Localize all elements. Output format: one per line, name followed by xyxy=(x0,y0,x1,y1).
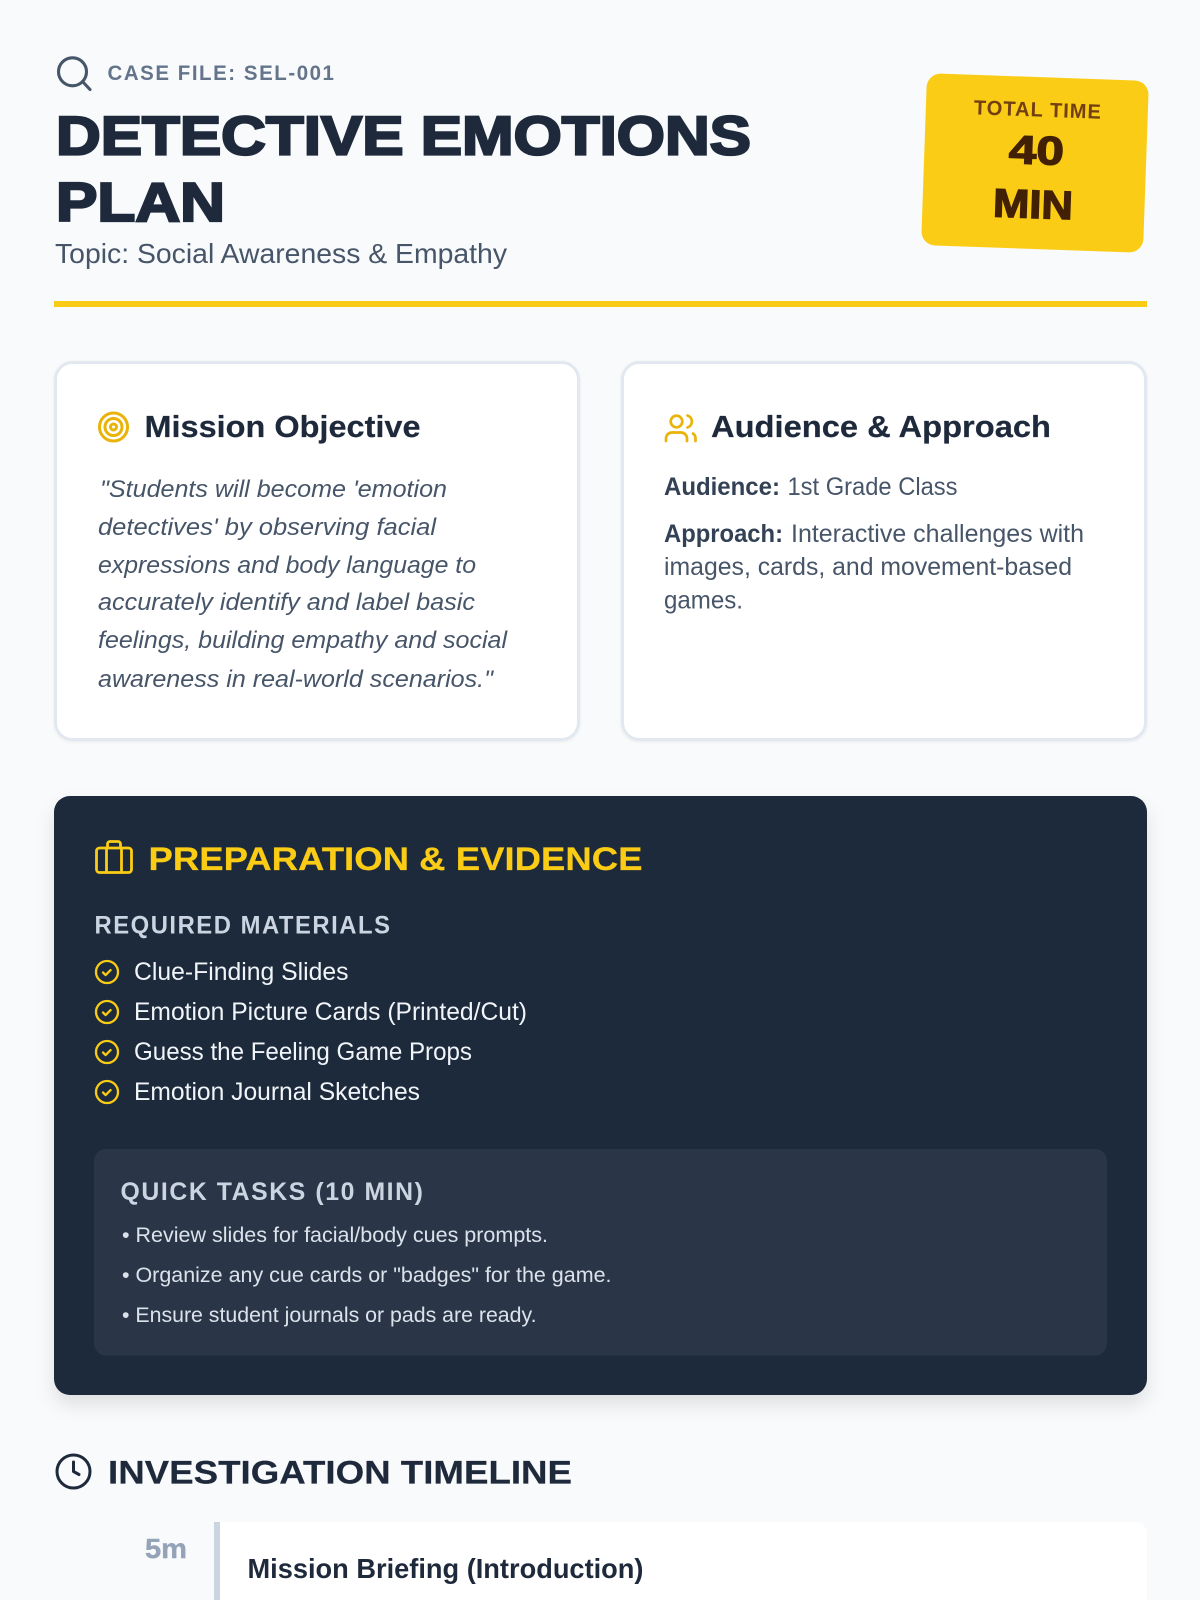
objective quote: detectives' by observing facial xyxy=(98,514,437,541)
icon: users xyxy=(666,416,696,441)
materials list xyxy=(96,958,527,1106)
quick tasks list: • Ensure student journals or pads are ready. xyxy=(122,1303,536,1327)
title: DETECTIVE EMOTIONS xyxy=(56,104,751,166)
approach text: Interactive challenges with xyxy=(791,520,1084,548)
header xyxy=(55,58,751,269)
timeline step: mission briefing xyxy=(145,1522,1147,1600)
approach text: Approach: xyxy=(664,520,783,548)
approach text: games. xyxy=(664,586,743,614)
heading: PREPARATION & EVIDENCE xyxy=(148,841,642,877)
heading: Mission Objective xyxy=(144,409,420,444)
item: cards: Emotion Picture Cards (Printed/Cut) xyxy=(134,998,527,1026)
icon: target xyxy=(100,413,128,441)
audience text: Audience: xyxy=(664,473,780,501)
item: slides: Clue-Finding Slides xyxy=(134,958,348,986)
total time badge xyxy=(921,73,1149,253)
total time badge: MIN xyxy=(992,182,1074,228)
objective quote xyxy=(98,476,508,693)
timeline heading: INVESTIGATION TIMELINE xyxy=(108,1454,572,1490)
step title: Mission Briefing (Introduction) xyxy=(248,1553,644,1584)
quick tasks box xyxy=(94,1149,1107,1356)
objective quote: expressions and body language to xyxy=(98,552,476,579)
panel: preparation and evidence xyxy=(54,796,1147,1395)
objective quote: awareness in real-world scenarios." xyxy=(98,666,494,693)
topic subtitle: Topic: Social Awareness & Empathy xyxy=(55,238,507,269)
approach text: images, cards, and movement-based xyxy=(664,553,1072,581)
panel: audience and approach xyxy=(622,362,1146,740)
heading: Audience & Approach xyxy=(711,409,1051,444)
timeline section xyxy=(57,1454,1147,1600)
icon: clock xyxy=(57,1455,90,1488)
required materials heading: REQUIRED MATERIALS xyxy=(94,912,392,940)
objective quote: accurately identify and label basic xyxy=(98,589,475,616)
total time badge: TOTAL TIME xyxy=(973,96,1102,124)
objective quote: feelings, building empathy and social xyxy=(98,627,508,654)
case file label: CASE FILE: SEL-001 xyxy=(108,62,336,85)
audience text: 1st Grade Class xyxy=(788,473,958,501)
timeline bar xyxy=(214,1522,220,1600)
step card xyxy=(220,1522,1147,1600)
title: PLAN xyxy=(56,171,225,233)
title xyxy=(56,104,751,233)
panel: mission objective xyxy=(56,362,578,740)
quick tasks list: • Review slides for facial/body cues prompts. xyxy=(122,1223,548,1247)
total time badge: 40 xyxy=(1008,128,1065,174)
quick tasks heading: QUICK TASKS (10 MIN) xyxy=(120,1178,424,1206)
duration: 5m xyxy=(145,1533,187,1564)
item: props: Guess the Feeling Game Props xyxy=(134,1038,472,1066)
objective quote: "Students will become 'emotion xyxy=(100,476,447,503)
item: journal: Emotion Journal Sketches xyxy=(134,1078,420,1106)
approach text xyxy=(664,520,1084,614)
icon: magnifying glass xyxy=(58,58,90,90)
audience text xyxy=(664,473,958,501)
quick tasks list xyxy=(122,1223,612,1327)
icon: briefcase xyxy=(96,842,132,872)
header divider xyxy=(54,301,1147,307)
quick tasks list: • Organize any cue cards or "badges" for the game. xyxy=(122,1263,612,1287)
